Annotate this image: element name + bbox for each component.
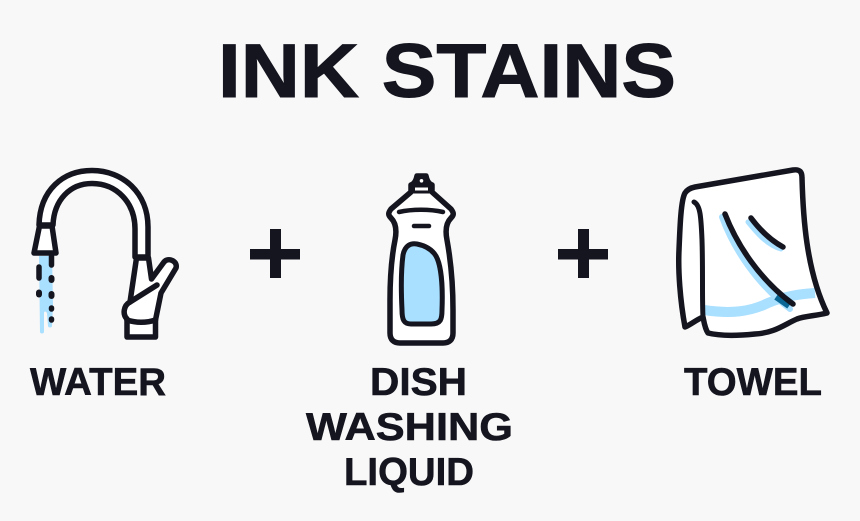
label: dish washing liquid: [306, 361, 513, 494]
icon: dish washing liquid bottle: [389, 176, 453, 343]
icon: water stream: [39, 256, 53, 334]
plus sign 2: [558, 229, 608, 278]
label: dish washing liquid: WASHING: [306, 406, 513, 449]
bottle label: [401, 244, 442, 324]
label: water: WATER: [30, 361, 166, 404]
icon: towel: [679, 170, 827, 335]
plus sign 1: [250, 229, 300, 278]
label: towel: TOWEL: [684, 361, 822, 404]
label: dish washing liquid: LIQUID: [344, 451, 474, 494]
towel stripe: [704, 293, 815, 312]
label: dish washing liquid: DISH: [370, 361, 467, 404]
icon: water faucet: [34, 170, 176, 337]
title: INK STAINS: [218, 29, 676, 114]
